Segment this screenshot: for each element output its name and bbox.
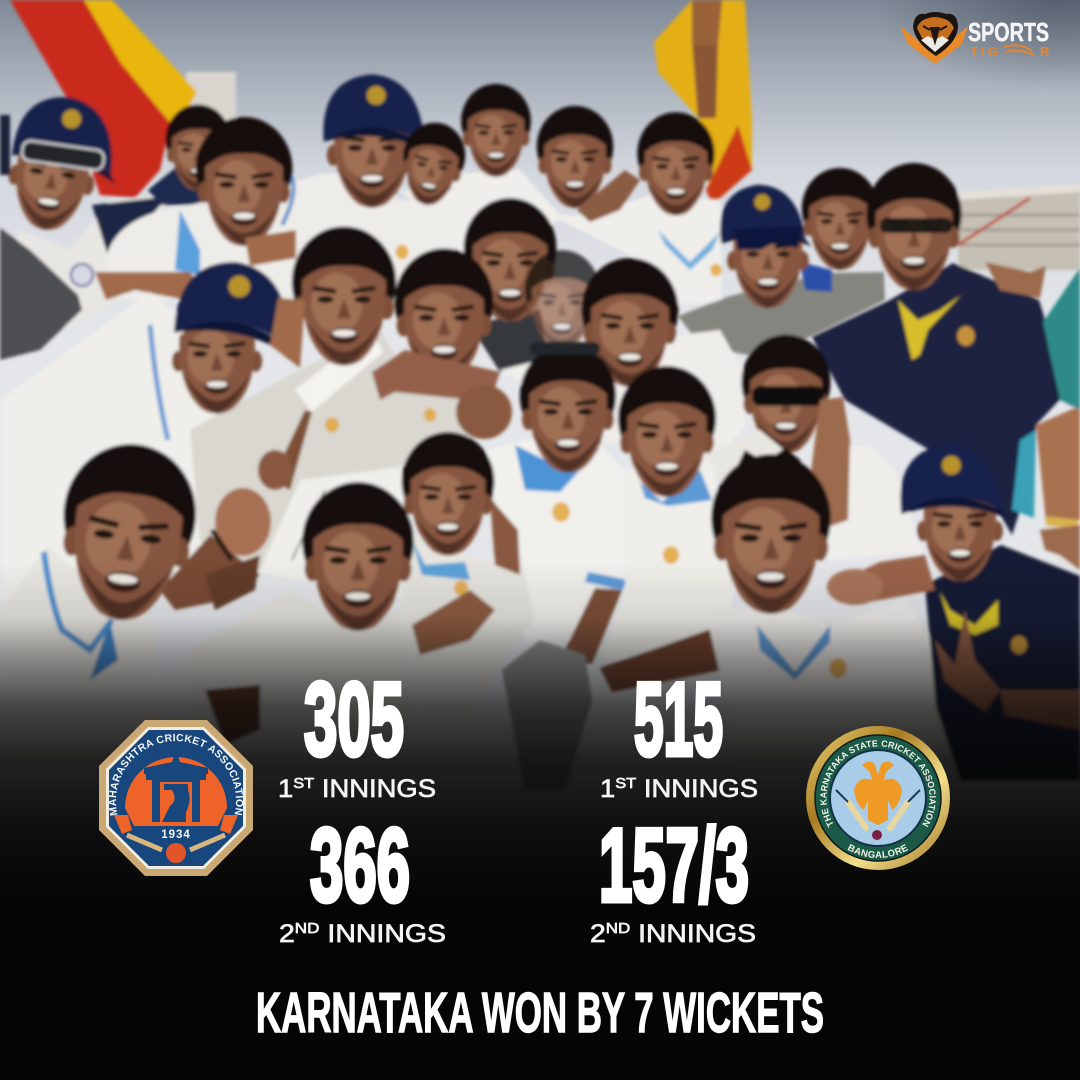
- brand logo: Sports Tiger: TIG: [970, 44, 998, 59]
- brand logo: Sports Tiger: [900, 12, 1050, 64]
- middle row heads: [292, 198, 678, 439]
- brand logo: Sports Tiger: R: [1040, 44, 1050, 59]
- panel: Maharashtra scores: [278, 662, 446, 948]
- logo: Karnataka State Cricket Association: BANGALORE: [848, 844, 908, 858]
- logo: Maharashtra Cricket Association: [99, 720, 253, 876]
- label: Karnataka 1st innings: INNINGS: [644, 775, 758, 803]
- front cap man: [172, 256, 831, 453]
- back row heads: [0, 74, 715, 302]
- label: Maharashtra 1st innings: 1: [278, 775, 292, 803]
- label: Karnataka 1st innings: 1: [600, 775, 614, 803]
- score: 305: 305: [304, 662, 404, 778]
- white shirts lower: [487, 342, 922, 790]
- label: Karnataka 1st innings: ST: [615, 775, 636, 792]
- grey shirt and right group: [678, 163, 1080, 535]
- score: 157/3: 157/3: [599, 808, 749, 924]
- logo: Karnataka State Cricket Association: THE KARNATAKA STATE CRICKET ASSOCIATION: [820, 740, 936, 828]
- label: Karnataka 2nd innings: INNINGS: [638, 920, 756, 948]
- panel: Karnataka scores: [590, 662, 758, 948]
- label: Karnataka 2nd innings: 2: [590, 920, 604, 948]
- brand logo: Sports Tiger: SPORTS: [968, 17, 1049, 47]
- logo: Karnataka State Cricket Association: [806, 726, 950, 870]
- dark fade overlay: [0, 560, 1080, 1080]
- score: 366: 366: [310, 808, 410, 924]
- label: Maharashtra 2nd innings: 2: [279, 920, 293, 948]
- right flag: [654, 0, 752, 205]
- label: Maharashtra 2nd innings: INNINGS: [327, 920, 446, 948]
- score: 515: 515: [634, 662, 723, 778]
- left flag: [10, 0, 197, 198]
- label: Maharashtra 2nd innings: ND: [295, 920, 320, 937]
- logo: Maharashtra Cricket Association: MAHARASHTRA CRICKET ASSOCIATION: [109, 734, 244, 816]
- label: Maharashtra 1st innings: INNINGS: [322, 775, 436, 803]
- front row: [0, 432, 1080, 790]
- logo: Maharashtra Cricket Association: 1934: [161, 829, 191, 841]
- back row bodies: [0, 160, 722, 360]
- middle row bodies: [0, 292, 748, 600]
- label: Maharashtra 1st innings: ST: [293, 775, 314, 792]
- stadium stand: [186, 72, 1080, 270]
- label: Karnataka 2nd innings: ND: [606, 920, 630, 937]
